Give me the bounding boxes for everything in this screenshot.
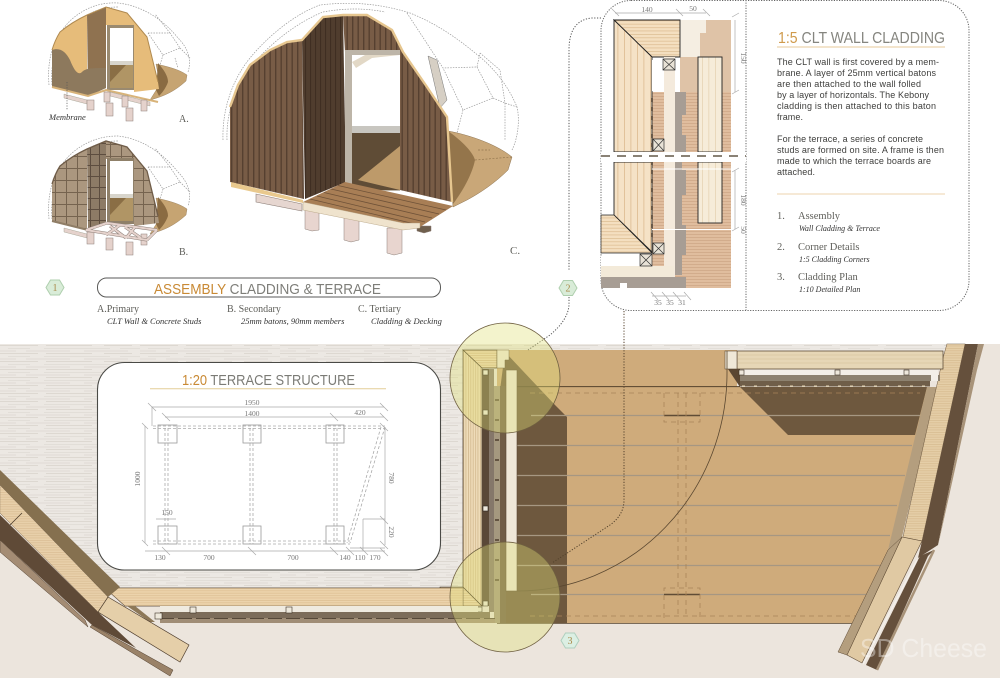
body text: studs are formed on site. A frame is then	[777, 145, 944, 155]
body text: attached.	[777, 167, 815, 177]
step marker 2	[559, 280, 577, 296]
terrace frame and studs	[86, 223, 157, 255]
body text: The CLT wall is first covered by a mem-	[777, 57, 939, 67]
contents list: 1:5 Cladding Corners	[799, 255, 870, 264]
assembly legend	[97, 304, 442, 326]
dimensions: 1400	[244, 409, 260, 418]
title bar: assembly cladding and terrace: ASSEMBLY CLADDING & TERRACE	[154, 282, 381, 298]
dimensions: 700	[287, 553, 299, 562]
step marker 3	[561, 633, 579, 648]
body text: made to which the terrace boards are	[777, 156, 931, 166]
contents list: Assembly	[798, 211, 841, 222]
dimensions	[612, 4, 748, 307]
assembly legend: B. Secondary	[227, 304, 281, 315]
terrace floor	[150, 64, 187, 100]
terrace floor	[150, 198, 187, 234]
contents list	[777, 211, 880, 294]
deck plank lines	[517, 416, 920, 594]
bottom wall section	[105, 588, 495, 623]
deck shadow left	[500, 352, 567, 623]
concrete studs	[305, 208, 431, 255]
heading: 1:5 CLT WALL CLADDING	[778, 30, 945, 47]
terrace deck	[497, 350, 938, 624]
watermark: SD Cheese	[860, 633, 987, 663]
door	[107, 158, 134, 224]
contents list: 1:10 Detailed Plan	[799, 285, 860, 294]
dimensions: 35	[666, 298, 674, 307]
fixing boxes	[739, 370, 909, 375]
model B: secondary assembly	[49, 136, 190, 258]
assembly legend: A.Primary	[97, 304, 139, 315]
body text: cladding is then attached to this baton	[777, 101, 936, 111]
label: B.	[179, 247, 188, 258]
top wall section	[725, 351, 943, 387]
base trim	[231, 182, 303, 203]
assembly legend: CLT Wall & Concrete Studs	[107, 316, 202, 326]
arch trim	[230, 15, 452, 202]
body text: are then attached to the wall folled	[777, 79, 921, 89]
terrace plan drawing	[133, 398, 396, 562]
hidden structure dashes	[530, 393, 920, 618]
studs	[87, 92, 147, 121]
dimensions: 1000	[133, 471, 142, 486]
rear under-beam	[256, 194, 302, 211]
dimensions: 150	[161, 508, 173, 517]
body text: brane. A layer of 25mm vertical batons	[777, 68, 936, 78]
dimensions: 1950	[244, 398, 260, 407]
dimensions: 140	[641, 5, 653, 14]
model A: primary assembly	[48, 3, 190, 125]
dimensions: 170	[369, 553, 381, 562]
body text: by a layer of horizontals. The Kebony	[777, 90, 930, 100]
body text: frame.	[777, 112, 803, 122]
membrane	[52, 49, 106, 96]
dimensions: 140	[339, 553, 351, 562]
beige ground	[0, 344, 1000, 678]
step marker 1: 1	[52, 283, 58, 294]
corner detail drawing	[601, 4, 748, 307]
right wall	[106, 7, 159, 92]
label: C.	[510, 245, 520, 257]
model C: tertiary assembly	[223, 3, 520, 257]
step marker 1	[46, 280, 64, 295]
detail circle 2	[450, 323, 560, 433]
body text: For the terrace, a series of concrete	[777, 134, 923, 144]
detail circle 3	[450, 542, 560, 652]
window in roof	[428, 56, 447, 108]
label: Membrane	[48, 112, 86, 122]
panel: 1:20 terrace structure	[98, 362, 440, 570]
fixing crosses	[640, 59, 675, 266]
hatched ground	[0, 344, 950, 588]
dimensions: 180	[739, 194, 748, 206]
contents list: 1.	[777, 211, 785, 222]
contents list: Wall Cladding & Terrace	[799, 224, 880, 233]
connector: dotted leader from panel to detail 3	[552, 311, 624, 563]
dimensions: 700	[203, 553, 215, 562]
dimensions: 420	[354, 408, 366, 417]
dimensions: 780	[387, 472, 396, 484]
panel: 1:5 CLT wall cladding	[601, 0, 969, 310]
right wall lower cladding	[847, 537, 922, 663]
contents list: Cladding Plan	[798, 272, 859, 283]
dimensions: 110	[355, 553, 366, 562]
right wall upper cladding	[903, 344, 965, 541]
terrace floor	[448, 131, 512, 207]
dimensions: 130	[154, 553, 166, 562]
right wall grid	[106, 141, 159, 226]
connector: dotted leader from panel to detail 2	[528, 18, 601, 350]
dimensions: 31	[678, 298, 686, 307]
right wall outer band	[938, 344, 984, 545]
geodesic dome outline	[223, 3, 518, 150]
left wall grid	[52, 149, 87, 230]
dimensions: 35	[654, 298, 662, 307]
right wall dark band	[918, 344, 978, 558]
dimensions: 50	[689, 4, 697, 13]
dimensions: 50	[739, 226, 748, 234]
heading: 1:20 TERRACE STRUCTURE	[182, 372, 355, 389]
site plan: cladding plan drawing	[0, 344, 1000, 678]
contents list: 2.	[777, 242, 785, 253]
corner wall	[87, 7, 106, 96]
dimensions: 150	[739, 52, 748, 64]
left wall at deck	[440, 350, 517, 623]
step marker 3: 3	[568, 636, 572, 647]
assembly legend: C. Tertiary	[358, 304, 401, 315]
geodesic dome outline	[49, 3, 190, 85]
assembly legend: Cladding & Decking	[371, 316, 442, 326]
door opening	[345, 50, 400, 191]
contents list: Corner Details	[798, 242, 860, 253]
left wall	[52, 15, 87, 96]
title bar: assembly cladding and terrace	[98, 278, 440, 298]
model A: primary assembly: A.	[179, 114, 189, 125]
left angled wall	[0, 470, 189, 676]
right wall lower dark band	[866, 550, 934, 670]
geodesic dome outline	[49, 136, 190, 219]
membrane leader	[66, 82, 68, 110]
door	[107, 25, 134, 90]
corner wall grid	[87, 141, 106, 230]
fixing boxes	[477, 370, 488, 612]
contents list: 3.	[777, 272, 785, 283]
deck	[303, 182, 453, 230]
left wall	[230, 40, 304, 199]
right wall	[343, 15, 452, 202]
connector: curved plan line	[517, 351, 727, 591]
dimensions	[133, 398, 396, 562]
dimensions: 220	[387, 526, 396, 538]
terrace edge band right	[888, 387, 938, 550]
deck shadow top	[740, 387, 927, 435]
corner wall	[302, 15, 346, 199]
section break	[601, 152, 746, 162]
body text	[777, 57, 944, 177]
step marker 2: 2	[566, 284, 570, 294]
fixing boxes	[155, 607, 292, 619]
assembly legend: 25mm batons, 90mm members	[241, 316, 345, 326]
